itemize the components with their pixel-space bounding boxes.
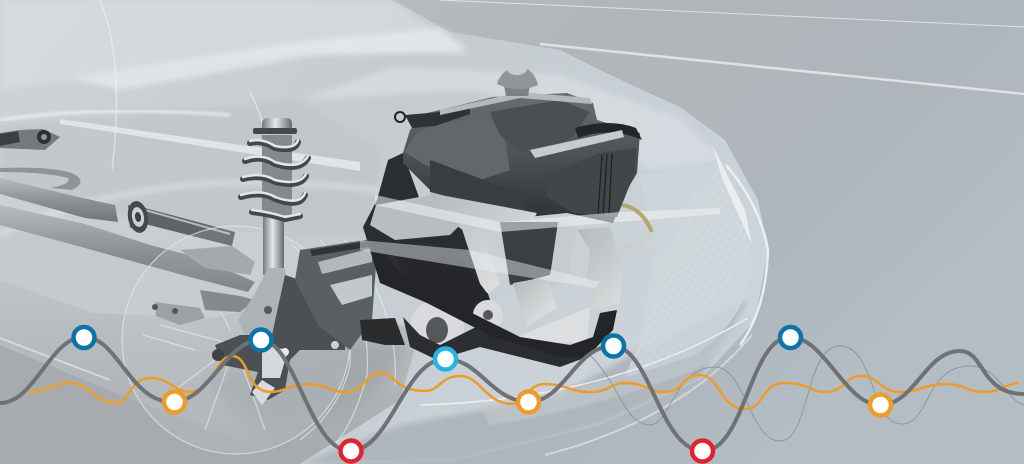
lower flange [403, 317, 587, 367]
dark centre [500, 222, 560, 285]
road stripes [440, 0, 1024, 94]
grille mesh [625, 165, 752, 375]
lower dark [397, 257, 500, 330]
black pipe [370, 250, 617, 357]
side panel [0, 215, 300, 318]
pulley small [473, 300, 503, 330]
glass streaks over engine [360, 195, 720, 288]
valve cover [405, 118, 510, 180]
airbox ribs [598, 153, 612, 215]
arm small [152, 290, 255, 325]
marker: red [692, 440, 713, 462]
marker: orange [870, 394, 891, 416]
marker: light blue [435, 348, 456, 370]
air box [547, 148, 637, 217]
lower dark left [363, 153, 490, 300]
marker: blue [603, 336, 624, 356]
driveshaft [0, 178, 255, 292]
stabilizer bar [0, 168, 81, 190]
right silver housing [577, 227, 653, 310]
hoses [575, 123, 642, 140]
car body glass [0, 0, 768, 464]
pulley large [410, 300, 464, 354]
yellow hose [622, 205, 652, 232]
gray wave [0, 337, 1024, 451]
marker: orange [518, 392, 539, 412]
waves chart [0, 337, 1024, 451]
bracket [513, 277, 557, 327]
lower floor dark [0, 280, 420, 464]
brake hub and cross member [295, 238, 405, 350]
strut and spring [241, 118, 308, 275]
fender shading [0, 100, 380, 240]
head block [403, 93, 640, 223]
pale stripe [60, 119, 360, 171]
windscreen highlight [0, 0, 470, 90]
marker: red [340, 440, 362, 462]
white sweep lines [0, 0, 380, 235]
oil cap [497, 63, 538, 96]
markers [74, 327, 891, 462]
wheel rings [122, 226, 395, 454]
under bumper shade [300, 300, 748, 464]
marker: blue peak [74, 327, 94, 348]
engine [360, 63, 720, 367]
brake disc translucent [122, 226, 350, 454]
car silhouette [0, 0, 768, 464]
marker: blue [780, 327, 801, 348]
marker: blue [250, 330, 272, 350]
orange wave [30, 356, 1018, 409]
knuckle [212, 268, 345, 405]
marker: orange [164, 392, 185, 412]
hood bright area [300, 66, 722, 170]
rear suspension arm [0, 129, 60, 150]
silver left cover [427, 193, 537, 293]
thin teal wave [590, 346, 1024, 441]
grille [625, 165, 752, 378]
